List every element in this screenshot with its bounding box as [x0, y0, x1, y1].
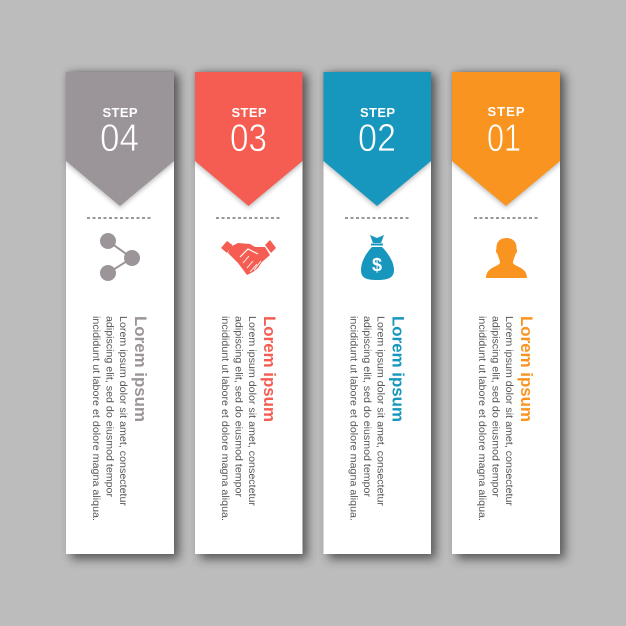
body text: step 03: adipiscing elit, sed do eiusmod tempor [232, 316, 244, 497]
label: step 04: STEP [102, 105, 138, 120]
body text: step 01: incididunt ut labore et dolore magna aliqua. [476, 316, 488, 521]
dollar sign: $ [372, 255, 382, 275]
heading: step 04: Lorem ipsum [131, 316, 149, 422]
body text: step 01: Lorem ipsum dolor sit amet, consectetur [503, 316, 515, 507]
icon: share network [100, 233, 140, 281]
body text: step 01: adipiscing elit, sed do eiusmod tempor [490, 316, 502, 497]
body text: step 02: adipiscing elit, sed do eiusmod tempor [361, 316, 373, 497]
panel: step 04 [66, 72, 179, 559]
body text: step 02 [348, 316, 386, 521]
banner: step 02 [324, 72, 431, 206]
body text: step 03 [219, 316, 258, 521]
icon: person [486, 238, 527, 278]
panel: step 01 [452, 72, 565, 559]
number: 04: 04 [100, 117, 139, 160]
banner: step 04 [66, 72, 174, 206]
heading: step 03: Lorem ipsum [260, 316, 278, 422]
label: step 02: STEP [360, 105, 395, 120]
body text: step 02: incididunt ut labore et dolore magna aliqua. [348, 316, 360, 521]
body text: step 04: Lorem ipsum dolor sit amet, consectetur [117, 316, 129, 507]
body text: step 02: Lorem ipsum dolor sit amet, consectetur [374, 316, 386, 507]
label: step 03: STEP [232, 105, 267, 120]
panel: step 02 [324, 72, 436, 559]
body text: step 03: Lorem ipsum dolor sit amet, consectetur [246, 316, 258, 507]
icon: handshake [221, 240, 276, 275]
number: 02: 02 [358, 117, 396, 160]
heading: step 02: Lorem ipsum [388, 316, 406, 422]
label: step 01: STEP [488, 104, 525, 119]
panel: step 03 [195, 72, 308, 559]
body text: step 04 [90, 316, 129, 521]
icon: money bag [361, 235, 394, 280]
number: 03: 03 [230, 117, 267, 160]
banner: step 03 [195, 72, 302, 206]
banner: step 01 [452, 72, 560, 206]
body text: step 04: adipiscing elit, sed do eiusmod tempor [104, 316, 116, 497]
heading: step 01: Lorem ipsum [517, 316, 535, 422]
number: 01: 01 [487, 117, 521, 160]
body text: step 03: incididunt ut labore et dolore magna aliqua. [219, 316, 231, 521]
body text: step 04: incididunt ut labore et dolore magna aliqua. [90, 316, 102, 521]
body text: step 01 [476, 316, 515, 521]
